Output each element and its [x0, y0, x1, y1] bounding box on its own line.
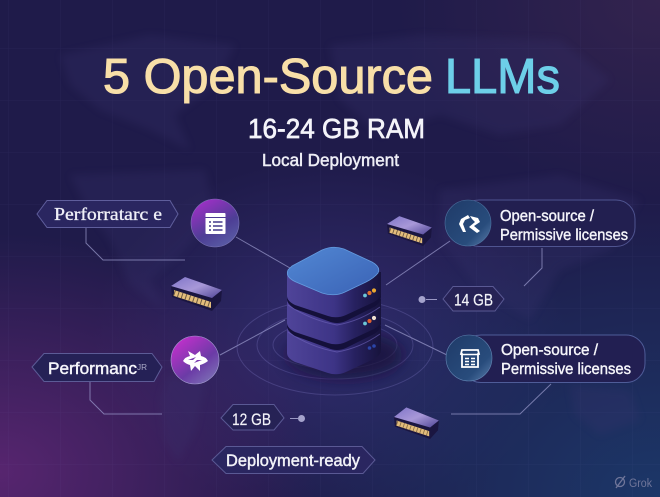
title: 5 Open-Source — [103, 50, 433, 104]
badge: deployment-ready — [212, 446, 375, 474]
server layer: middle — [287, 299, 381, 350]
badge: deployment-ready: Deployment-ready — [226, 451, 360, 470]
world map backdrop — [60, 35, 640, 462]
server layer: top — [287, 272, 381, 323]
panel: top-left performance label — [37, 200, 178, 228]
panel: lower-left performance label: JR — [137, 363, 147, 372]
badge: 14 GB: 14 GB — [454, 290, 493, 310]
panel: lower right license callout: Open-source / — [501, 342, 599, 359]
panel: lower right license callout: Permissive licenses — [501, 361, 631, 378]
panel: lower-left performance label: Performanc — [48, 359, 137, 378]
marker: 14 GB dot — [418, 296, 437, 303]
panel: lower right license callout — [446, 335, 645, 382]
badge: 12 GB: 12 GB — [232, 410, 271, 429]
panel: lower-left performance label — [32, 354, 162, 382]
platform rings — [237, 299, 433, 395]
icon: blue circle glyph — [445, 200, 491, 246]
server top face — [287, 247, 379, 295]
subtitle: local deployment: Local Deployment — [262, 150, 399, 170]
server status lights — [363, 288, 376, 350]
server layer: bottom — [287, 326, 381, 374]
watermark: Grok — [616, 476, 652, 490]
icon: archive table in blue circle — [446, 335, 492, 381]
panel: upper right license callout — [445, 200, 635, 246]
marker: 12 GB dot — [290, 415, 305, 422]
RAM chip: lower right — [394, 407, 439, 439]
title: LLMs — [445, 50, 560, 104]
RAM chip: upper right — [387, 216, 432, 246]
subtitle: RAM range: 16-24 GB RAM — [248, 113, 425, 144]
watermark: Grok: Grok — [629, 478, 652, 490]
icon: table in purple circle — [191, 199, 239, 247]
icon: spark in magenta circle — [171, 336, 219, 384]
panel: upper right license callout: Open-source / — [500, 208, 595, 225]
connector lines — [86, 228, 551, 414]
badge: 14 GB — [443, 286, 504, 311]
panel: upper right license callout: Permissive licenses — [500, 227, 628, 244]
badge: 12 GB — [221, 404, 284, 430]
RAM chip: left — [171, 277, 222, 311]
central server — [287, 247, 403, 379]
panel: top-left performance label: Perforratarc e — [54, 204, 162, 224]
